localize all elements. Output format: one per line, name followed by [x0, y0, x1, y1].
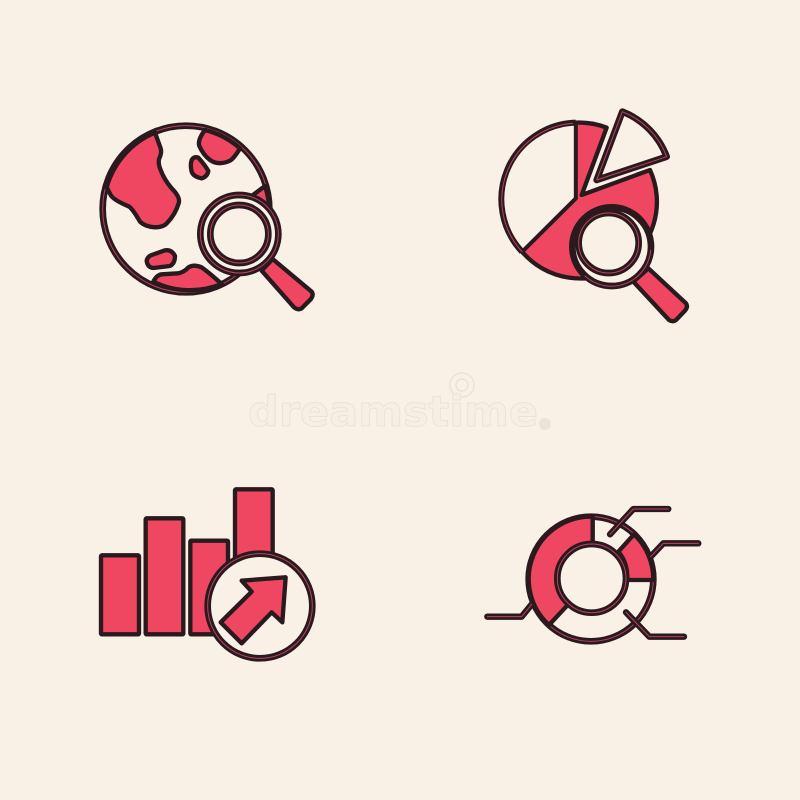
donut pink segments [529, 517, 653, 625]
donut outer ring [529, 517, 653, 641]
magnifying glass [572, 207, 687, 321]
pie cream sector [501, 123, 576, 252]
callout lines [487, 509, 698, 637]
magnifying glass [200, 195, 313, 309]
icon: globe with magnifying glass [103, 126, 313, 309]
icon: bar chart with growth arrow [101, 489, 312, 658]
icon: pie chart with magnifying glass [501, 112, 687, 321]
up arrow [221, 577, 286, 643]
arrow badge circle [208, 554, 312, 658]
globe outline [103, 126, 269, 292]
donut inner ring [557, 544, 626, 613]
pie pink sectors [522, 123, 657, 278]
detached pie slice [597, 112, 667, 180]
bars [101, 489, 273, 634]
icon: donut chart with callout lines [487, 509, 698, 641]
continents [107, 130, 269, 290]
watermark: dreamstime [248, 387, 538, 436]
